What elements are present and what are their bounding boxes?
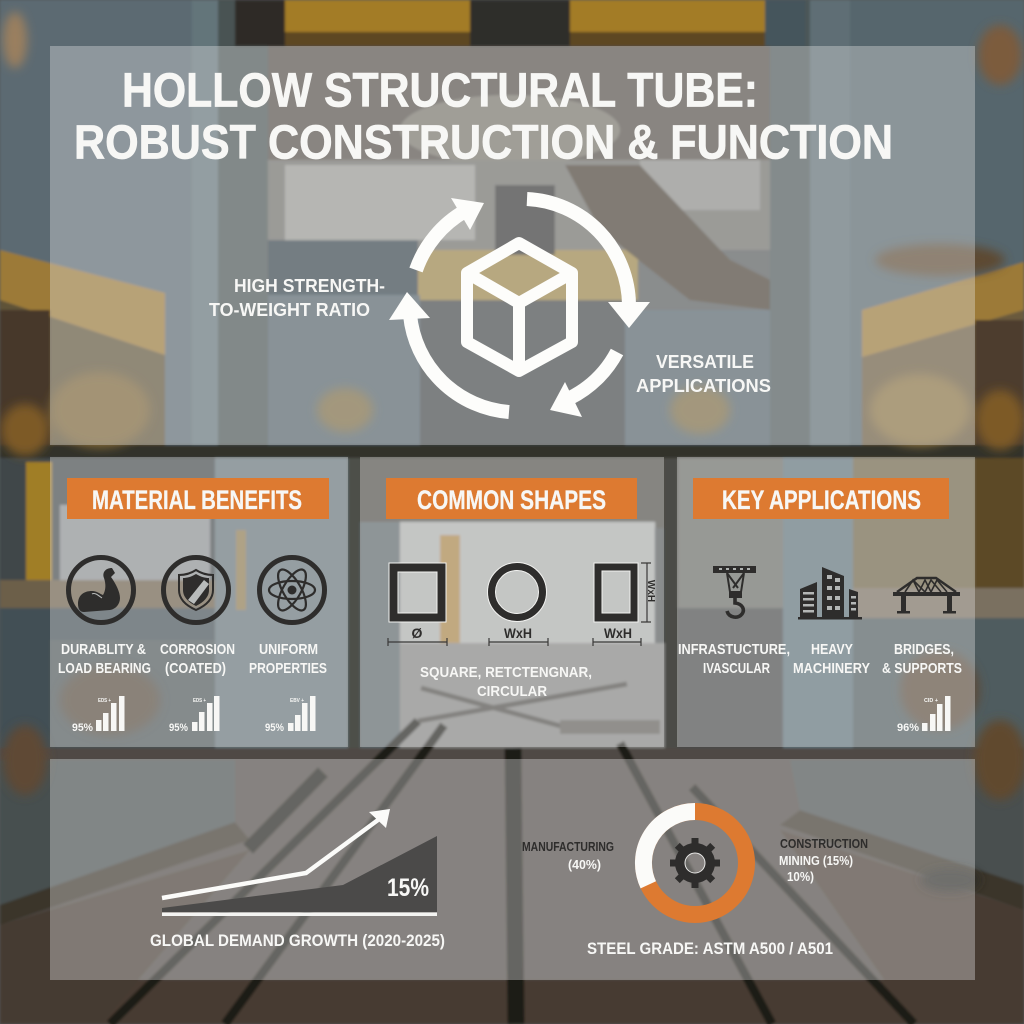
donut label: manufacturing [522, 839, 614, 872]
icon: truss bridge [893, 578, 960, 614]
title: HOLLOW STRUCTURAL TUBE: [122, 64, 758, 118]
label: infrastructure: IVASCULAR [703, 660, 770, 677]
area chart: global demand growth: 15% [387, 874, 429, 902]
label: uniform: UNIFORM [259, 641, 318, 658]
mini bar chart 3: 95% [265, 722, 284, 734]
label: corrosion [160, 641, 235, 677]
cycle arrows [389, 198, 650, 417]
label: infrastructure: INFRASTUCTURE, [678, 641, 790, 658]
mini bar chart 2 [169, 696, 220, 734]
mini bar chart 4: 96% [897, 722, 919, 734]
panel: material benefits [50, 457, 348, 747]
mini bar chart 3: EBV + [290, 698, 304, 704]
mini bar chart 1: EDS + [98, 698, 111, 704]
donut label: manufacturing: MANUFACTURING [522, 839, 614, 854]
mini bar chart 1 [72, 696, 124, 734]
walls [0, 0, 192, 760]
caption: demand growth: GLOBAL DEMAND GROWTH (2020-2025) [150, 931, 445, 950]
caption: shapes: CIRCULAR [477, 683, 547, 700]
label: bridges: BRIDGES, [894, 641, 954, 658]
panel: hero overlay [50, 46, 975, 445]
row center [348, 458, 364, 748]
mini bar chart 4 [897, 696, 950, 734]
dimension: round [489, 625, 548, 646]
label: uniform: PROPERTIES [249, 660, 327, 677]
label: high strength-to-weight ratio: TO-WEIGHT RATIO [209, 300, 370, 320]
shape: rectangular tube [594, 563, 638, 622]
central opening [268, 46, 770, 166]
icon: hollow cube [467, 243, 572, 371]
icon: gear [670, 838, 720, 888]
dimension: round: WxH [504, 625, 532, 641]
icon: shield [164, 558, 228, 622]
label: corrosion: (COATED) [165, 660, 226, 677]
label: heavy machinery: HEAVY [811, 641, 853, 658]
icon: flexed arm [68, 558, 134, 622]
label: durability: DURABLITY & [61, 641, 146, 658]
title [74, 64, 893, 170]
heading: common shapes: COMMON SHAPES [417, 485, 606, 515]
floor [0, 748, 1024, 1024]
area chart: global demand growth [162, 809, 437, 916]
row left [0, 458, 215, 583]
caption: shapes: SQUARE, RETCTENGNAR, [420, 664, 592, 681]
donut chart: end-use share [643, 812, 746, 914]
row right [678, 458, 783, 608]
mini bar chart 3 [265, 696, 316, 734]
heading: common shapes [386, 478, 637, 519]
shape: round tube [488, 562, 546, 622]
donut label: construction and mining: 10%) [787, 869, 814, 884]
donut label: construction and mining: MINING (15%) [779, 853, 853, 868]
dimension: rectangular [593, 563, 656, 646]
heading: key applications [693, 478, 949, 519]
side beams [0, 300, 165, 450]
caption: shapes [420, 664, 592, 700]
dimension: square [388, 625, 447, 646]
donut label: construction and mining: CONSTRUCTION [780, 836, 868, 851]
icon: atom [260, 558, 324, 622]
icon: buildings [798, 567, 862, 620]
panel: bottom statistics [50, 759, 975, 980]
label: corrosion: CORROSION [160, 641, 235, 658]
label: infrastructure [678, 641, 790, 677]
mini bar chart 4: CID + [924, 698, 938, 704]
label: bridges [882, 641, 962, 677]
label: versatile applications [636, 352, 771, 396]
title: ROBUST CONSTRUCTION & FUNCTION [74, 116, 893, 170]
dimension: rectangular: WxH [645, 580, 656, 602]
top strip [235, 0, 285, 46]
dark gap [0, 445, 1024, 458]
caption: steel grade: STEEL GRADE: ASTM A500 / A501 [587, 939, 833, 958]
dimension: square: Ø [412, 625, 423, 641]
mini bar chart 2: 95% [169, 722, 188, 734]
panel: common shapes [360, 457, 664, 747]
label: heavy machinery [793, 641, 870, 677]
heading: material benefits [67, 478, 329, 519]
label: durability: LOAD BEARING [58, 660, 151, 677]
heading: material benefits: MATERIAL BENEFITS [92, 485, 302, 515]
mini bar chart 2: EDS + [193, 698, 206, 704]
label: high strength-to-weight ratio [209, 276, 385, 320]
label: high strength-to-weight ratio: HIGH STRENGTH- [234, 276, 385, 296]
label: versatile applications: APPLICATIONS [636, 376, 771, 396]
heading: key applications: KEY APPLICATIONS [722, 485, 921, 515]
label: versatile applications: VERSATILE [656, 352, 754, 372]
dimension: rectangular: WxH [604, 625, 632, 641]
donut label: construction and mining [779, 836, 868, 884]
label: uniform [249, 641, 327, 677]
label: bridges: & SUPPORTS [882, 660, 962, 677]
shape: square tube [389, 563, 446, 622]
icon: crane hook [713, 566, 756, 617]
donut label: manufacturing: (40%) [568, 857, 601, 872]
label: durability [58, 641, 151, 677]
panel: key applications [677, 457, 975, 747]
mini bar chart 1: 95% [72, 722, 93, 734]
label: heavy machinery: MACHINERY [793, 660, 870, 677]
